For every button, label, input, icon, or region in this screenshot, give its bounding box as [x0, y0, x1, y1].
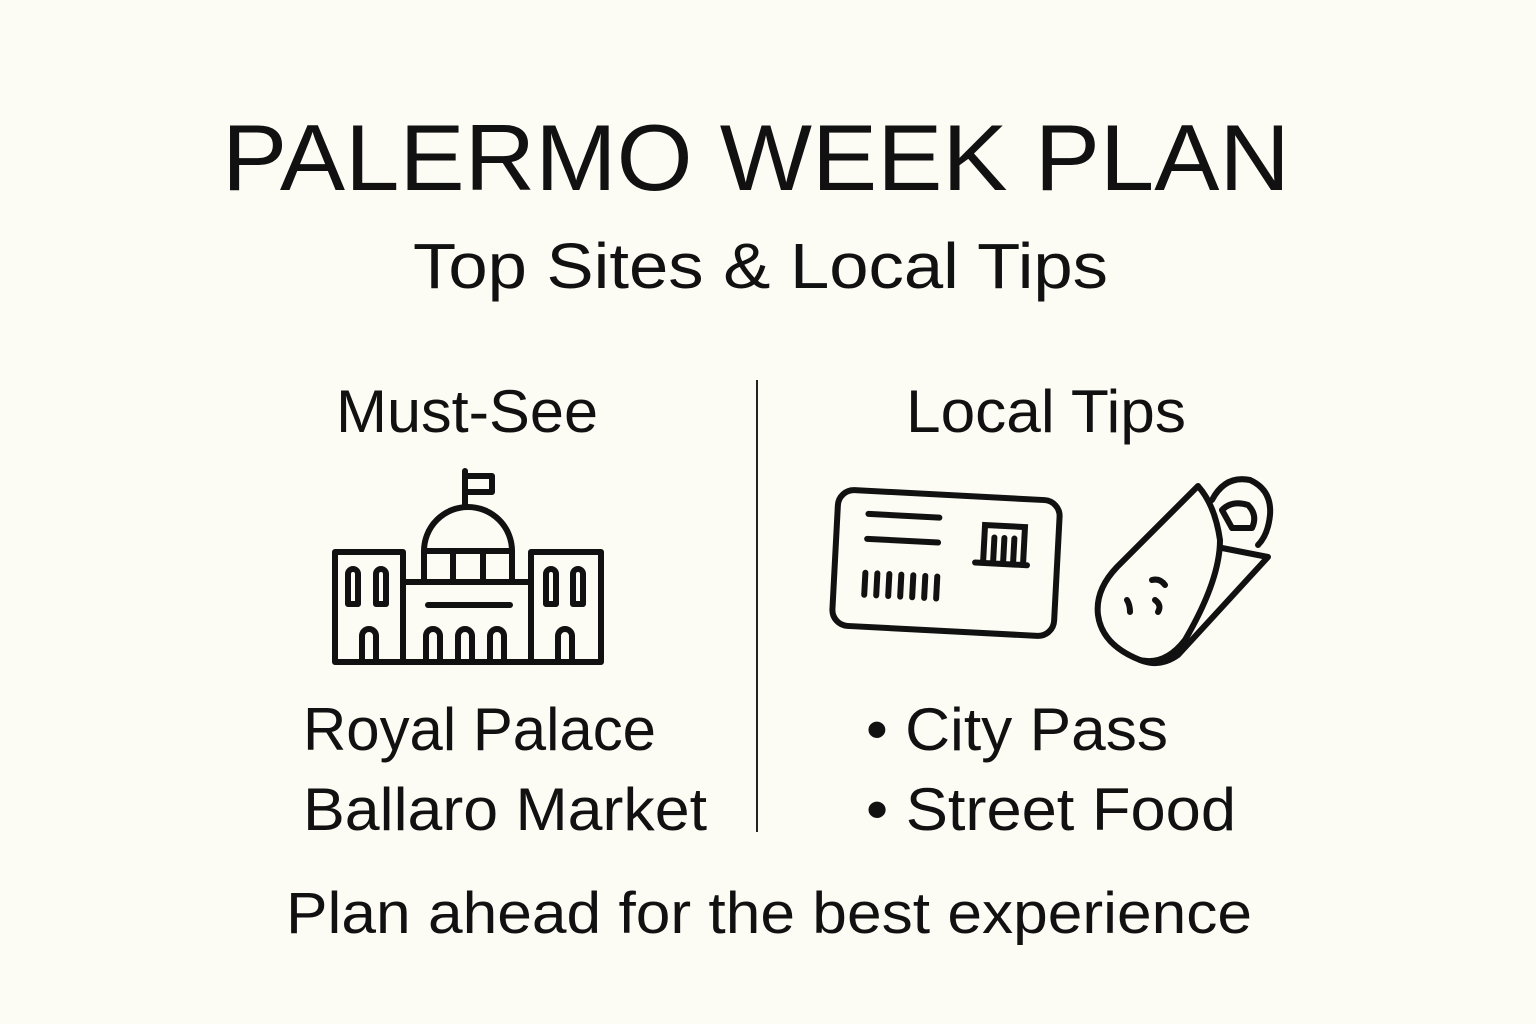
- list: must-see items: [303, 696, 707, 843]
- list: must-see items: Ballaro Market: [303, 776, 707, 843]
- icon: palace: [335, 471, 601, 662]
- heading: local tips: Local Tips: [906, 378, 1186, 445]
- panel: local tips: [832, 378, 1270, 843]
- list: local tips items: • City Pass: [866, 696, 1168, 763]
- icon: street food wrap: [1098, 479, 1270, 663]
- list: must-see items: Royal Palace: [303, 696, 656, 763]
- subtitle: Top Sites & Local Tips: [413, 230, 1108, 302]
- heading: must-see: Must-See: [336, 378, 598, 445]
- list: local tips items: [866, 696, 1236, 843]
- list: local tips items: • Street Food: [866, 776, 1236, 843]
- footer: Plan ahead for the best experience: [286, 881, 1252, 946]
- icon: city pass card: [832, 489, 1060, 637]
- title: PALERMO WEEK PLAN: [222, 105, 1290, 210]
- panel: must-see: [303, 378, 707, 843]
